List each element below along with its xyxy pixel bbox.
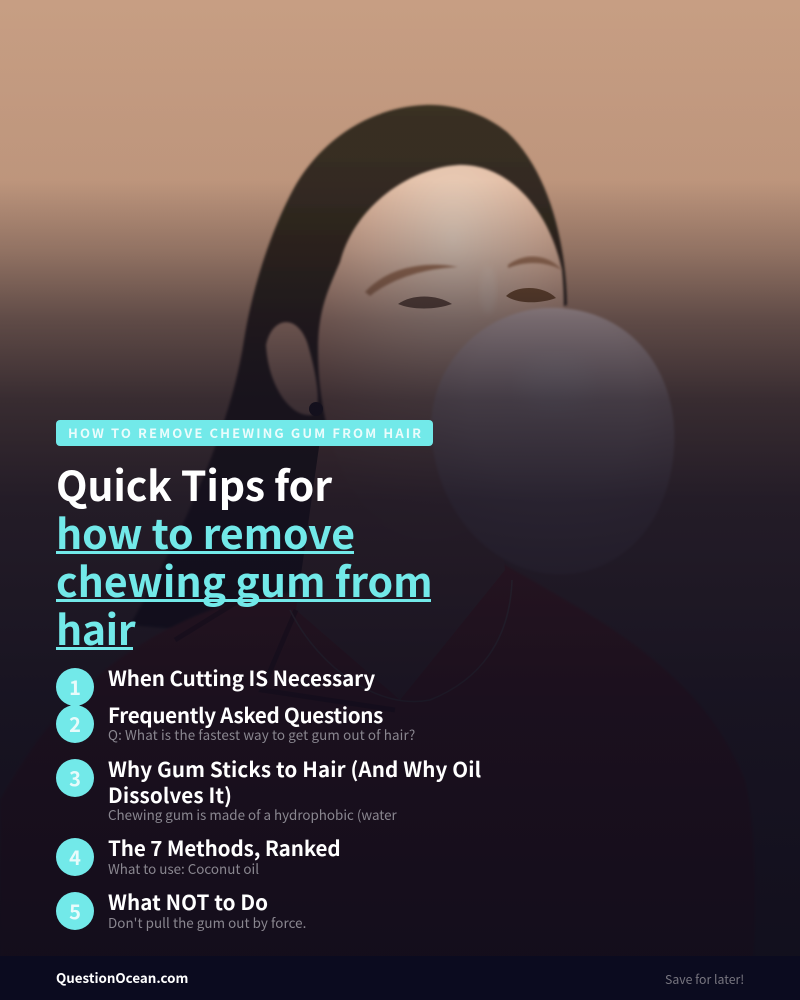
tip 2 description: Q: What is the fastest way to get gum out of hair? [108,724,415,744]
tip 1: When Cutting IS Necessary [56,662,375,706]
number badge 2: 2 [69,709,81,738]
collar lines [175,600,395,710]
tip 3: Why Gum Sticks to Hair [56,753,481,824]
left eyebrow [365,265,458,296]
right eyebrow [508,256,562,270]
title: Quick Tips for [56,453,332,513]
title underline 3 [56,647,133,650]
tip 5 heading: What NOT to Do [108,886,268,916]
number badge 3: 3 [69,763,81,792]
number badge 3 [56,759,94,797]
number badge 4 [56,838,94,876]
nose highlight [480,266,496,314]
number badge 5 [56,892,94,930]
tip 1 heading: When Cutting IS Necessary [108,662,375,692]
tip 5: What NOT to Do [56,886,306,932]
tip 4 heading: The 7 Methods, Ranked [108,832,341,862]
title: hair [56,597,135,657]
tip 4: The 7 Methods, Ranked [56,832,341,878]
tip 3 heading [108,753,481,809]
right eye [506,288,556,302]
footer bar [0,956,800,1000]
tip 5 description: Don't pull the gum out by force. [108,912,306,932]
save note: Save for later! [665,970,744,988]
tip 4 description: What to use: Coconut oil [108,858,259,878]
number badge 2 [56,705,94,743]
tip 3 heading: Why Gum Sticks to Hair (And Why Oil [108,753,481,783]
category tag: HOW TO REMOVE CHEWING GUM FROM HAIR [68,423,423,442]
shirt [0,562,755,1000]
tip 2: Frequently Asked Questions [56,699,415,744]
title underline 1 [56,551,354,554]
neck [296,440,505,700]
tip 2 heading: Frequently Asked Questions [108,699,383,729]
number badge 1: 1 [69,672,81,701]
gum bubble [431,308,674,574]
title: how to remove [56,501,355,561]
face [318,165,564,540]
category tag [56,420,433,446]
number badge 5: 5 [69,896,81,925]
bubble shading [520,357,592,413]
number badge 4: 4 [69,842,81,871]
title: chewing gum from [56,549,433,609]
earring [309,402,323,416]
title underline 2 [56,599,431,602]
necklace [290,580,512,702]
title [56,453,433,657]
number badge 1 [56,668,94,706]
hair [130,105,567,640]
left eye [398,296,452,308]
tip 3 description: Chewing gum is made of a hydrophobic (water [108,804,397,824]
brand name: QuestionOcean.com [56,968,188,987]
ear [266,322,318,415]
tip 3 heading: Dissolves It) [108,779,232,809]
